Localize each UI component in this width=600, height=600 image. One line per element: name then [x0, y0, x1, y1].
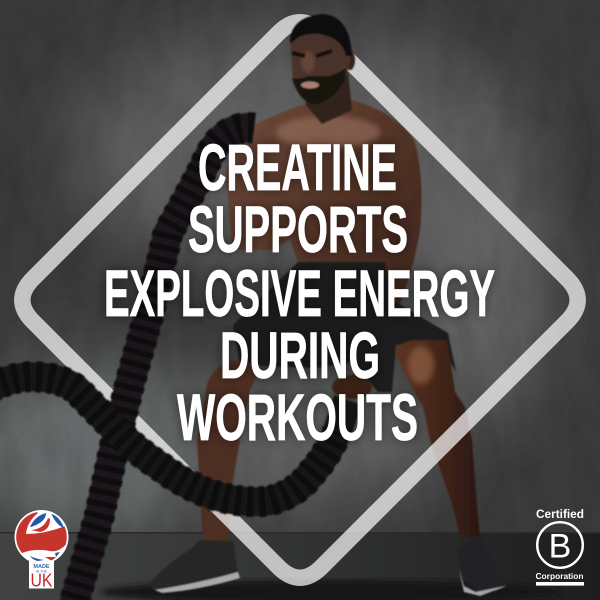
blue right [51, 513, 64, 528]
face [290, 26, 350, 105]
globe flag [16, 512, 67, 561]
back thigh and calf [197, 360, 262, 545]
torso and arms [226, 100, 422, 385]
hand on rope [332, 375, 372, 399]
B ring [537, 522, 583, 568]
athlete head [290, 14, 355, 124]
vertical rope twist [72, 128, 254, 600]
certified: Certified [536, 509, 584, 521]
hair [290, 14, 352, 56]
made: MADE [33, 564, 50, 570]
badge base [29, 555, 54, 588]
front shoe [457, 536, 507, 593]
badge: Certified B Corporation [536, 509, 584, 586]
knee highlight [408, 346, 434, 384]
front thigh and calf [395, 340, 480, 537]
line 5: WORKOUTS [177, 380, 418, 454]
ear [345, 50, 355, 70]
headline [104, 130, 495, 454]
eyes and brows [292, 51, 332, 56]
front shoe sole [459, 570, 506, 596]
mouth [301, 82, 319, 88]
lower blue [30, 552, 60, 561]
beard [292, 68, 346, 105]
battle ropes [0, 128, 348, 600]
nose highlight [301, 51, 315, 73]
back shoe sole [155, 572, 240, 593]
badge: Made in the UK [12, 510, 70, 590]
horizontal rope twist [0, 377, 337, 502]
blue left [30, 513, 46, 527]
red stripe [31, 518, 50, 532]
red band [16, 526, 67, 553]
chest highlight [276, 116, 380, 148]
corporation: Corporation [536, 572, 584, 581]
red arc [15, 511, 38, 534]
line 4: DURING [220, 318, 380, 392]
vertical rope strand [72, 128, 254, 600]
line 1: CREATINE [198, 130, 397, 204]
underline [536, 582, 584, 586]
athlete body [150, 100, 507, 596]
UK: UK [30, 570, 52, 590]
shorts [233, 262, 456, 392]
horizontal rope strand [0, 377, 348, 502]
globe white edge [14, 510, 68, 564]
line 2: SUPPORTS [188, 192, 408, 266]
lower red [45, 557, 56, 560]
in the: IN THE [36, 570, 48, 574]
B letter: B [549, 528, 571, 566]
neck [305, 72, 352, 124]
back shoe [150, 540, 238, 591]
